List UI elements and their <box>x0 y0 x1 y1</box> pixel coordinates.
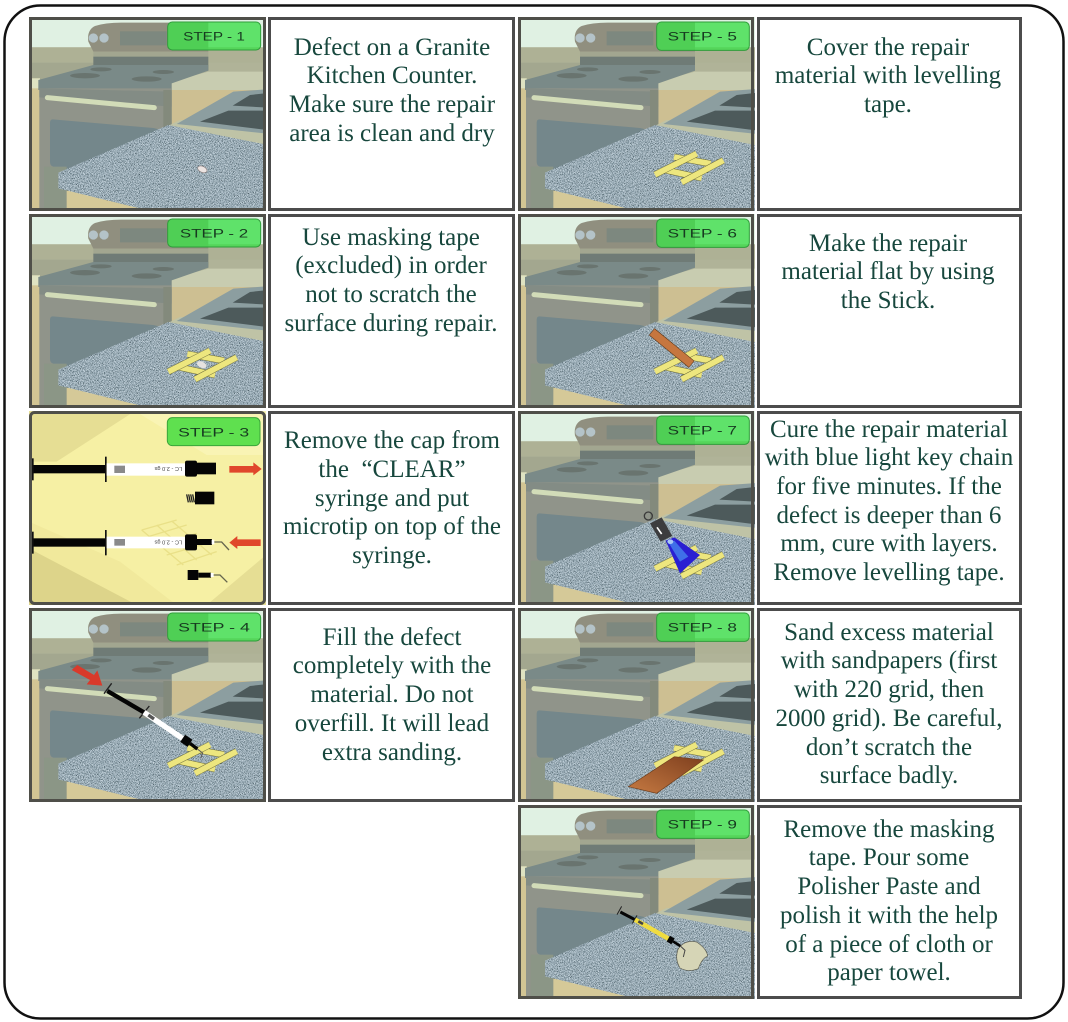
text: step 7: mm, cure with layers. <box>780 530 998 557</box>
text: step 8: with 220 grid, then <box>794 676 985 703</box>
syringe <box>104 683 203 758</box>
panel: step 8 illustration: STEP - 8 <box>668 620 737 634</box>
microtip <box>188 570 227 582</box>
text: step 9: tape. Pour some <box>809 844 969 871</box>
panel: step 1 illustration: STEP - 1 <box>183 29 245 43</box>
text: step 4: completely with the <box>293 652 491 679</box>
text: step 8: don’t scratch the <box>806 734 972 761</box>
text: step 8 <box>758 610 1020 800</box>
text: step 5 <box>758 18 1020 210</box>
panel: step 5 illustration: STEP - 5 <box>668 29 737 43</box>
text: step 9: of a piece of cloth or <box>785 931 993 958</box>
text: step 4: overfill. It will lead <box>295 710 490 737</box>
text: step 7: with blue light key chain <box>765 444 1014 471</box>
text: step 9 <box>758 806 1020 998</box>
text: step 4: extra sanding. <box>322 739 462 766</box>
text: step 5: Cover the repair <box>807 34 970 61</box>
text: step 7 <box>758 412 1020 604</box>
text: step 4: material. Do not <box>310 681 474 708</box>
panel: step 7 illustration <box>518 411 755 605</box>
text: step 6: material flat by using <box>781 258 995 285</box>
text: step 3: Remove the cap from <box>284 427 500 454</box>
text: step 3 <box>270 412 514 604</box>
text: step 1: area is clean and dry <box>289 120 495 147</box>
text: step 8: 2000 grid). Be careful, <box>775 705 1003 732</box>
text: step 2: not to scratch the <box>305 281 477 308</box>
syringe with microtip: LC - 2.0 gs <box>154 538 182 544</box>
arrow: cap off <box>229 462 262 475</box>
text: step 1: Kitchen Counter. <box>307 62 477 89</box>
text: step 3: microtip on top of the <box>283 513 501 540</box>
panel: step 3 illustration: STEP - 3 <box>178 425 250 439</box>
text: step 2: surface during repair. <box>284 310 498 337</box>
text: step 9: paper towel. <box>827 959 951 986</box>
arrow: microtip on <box>229 536 261 549</box>
text: step 7: defect is deeper than 6 <box>777 502 1001 529</box>
panel: step 6 illustration <box>518 214 755 408</box>
text: step 9: Polisher Paste and <box>797 873 981 900</box>
panel: step 3 illustration <box>29 411 266 605</box>
text: step 1 <box>270 18 514 210</box>
text: step 6: Make the repair <box>809 230 968 257</box>
text: step 2: (excluded) in order <box>295 252 487 279</box>
text: step 5: tape. <box>864 91 912 118</box>
text: step 8: surface badly. <box>820 762 958 789</box>
red arrow <box>72 665 102 686</box>
removed cap <box>187 492 214 504</box>
text: step 8: with sandpapers (first <box>781 647 997 674</box>
text: step 6 <box>758 216 1020 406</box>
text: step 2 <box>270 216 514 406</box>
text: step 7: Remove levelling tape. <box>773 559 1005 586</box>
text: step 4 <box>270 610 514 800</box>
syringe with microtip <box>32 530 229 555</box>
text: step 7: Cure the repair material <box>770 416 1008 443</box>
panel: step 9 illustration: STEP - 9 <box>668 817 737 831</box>
panel: step 4 illustration <box>29 608 266 802</box>
text: step 3: syringe. <box>352 542 432 569</box>
text: step 9: polish it with the help <box>780 902 998 929</box>
wooden stick <box>652 332 692 364</box>
text: step 3: syringe and put <box>315 485 469 512</box>
syringe with cap <box>32 457 216 482</box>
panel: step 2 illustration: STEP - 2 <box>180 226 249 240</box>
text: step 9: Remove the masking <box>783 816 995 843</box>
panel: step 1 illustration <box>29 17 266 211</box>
polisher syringe <box>617 906 685 957</box>
panel: step 5 illustration <box>518 17 755 211</box>
sandpaper <box>628 757 703 793</box>
panel: step 7 illustration: STEP - 7 <box>668 423 737 437</box>
text: step 4: Fill the defect <box>323 624 461 651</box>
text: step 2: Use masking tape <box>302 224 480 251</box>
panel: step 4 illustration: STEP - 4 <box>178 620 250 634</box>
panel: step 6 illustration: STEP - 6 <box>668 226 737 240</box>
syringe with cap: LC - 2.0 gs <box>154 465 182 471</box>
text: step 1: Defect on a Granite <box>294 34 490 61</box>
text: step 7: for five minutes. If the <box>776 473 1002 500</box>
text: step 1: Make sure the repair <box>289 91 496 118</box>
panel: step 9 illustration <box>518 805 755 999</box>
polishing cloth <box>677 941 708 971</box>
text: step 5: material with levelling <box>775 62 1002 89</box>
blue light key chain <box>644 512 700 573</box>
text: step 8: Sand excess material <box>784 619 994 646</box>
text: step 3: the “CLEAR” <box>318 456 466 483</box>
text: step 6: the Stick. <box>841 287 935 314</box>
panel: step 2 illustration <box>29 214 266 408</box>
panel: step 8 illustration <box>518 608 755 802</box>
